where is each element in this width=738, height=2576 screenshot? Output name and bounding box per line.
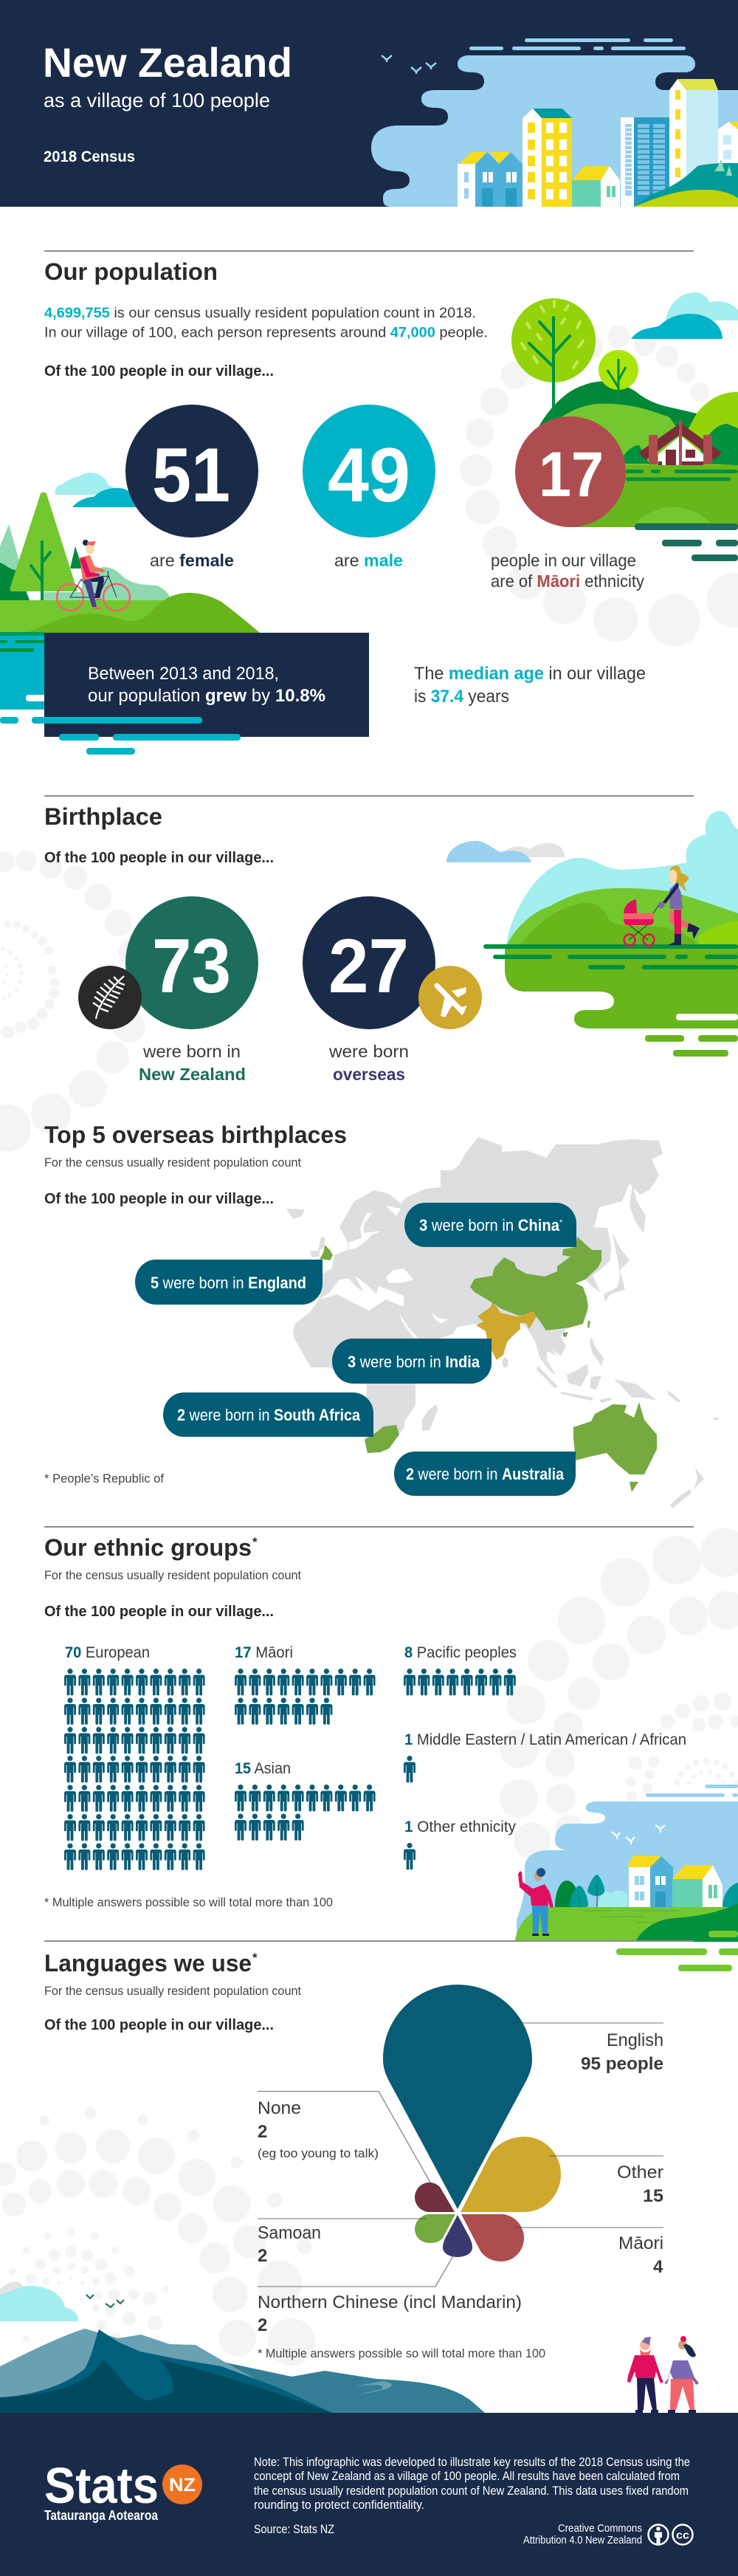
heading: Our population: Our population <box>44 258 218 285</box>
callout: India: 3 were born in India <box>348 1353 480 1371</box>
note text: Source: Stats NZ <box>254 2523 334 2536</box>
label: female: are female <box>150 551 234 570</box>
decorative dots: birthplace <box>0 851 145 1152</box>
pictogram: Other 1 <box>404 1818 516 1869</box>
section rule: population <box>44 250 694 252</box>
petal chart: languages <box>383 1985 561 2261</box>
label: Samoan: 2 <box>258 2246 267 2266</box>
label: None: (eg too young to talk) <box>258 2146 379 2160</box>
label: Northern Chinese <box>258 2292 522 2335</box>
stat: female: 51 <box>152 433 230 518</box>
header banner <box>0 0 738 207</box>
logo: Stats NZ <box>44 2457 202 2523</box>
heading: Birthplace: Birthplace <box>44 803 162 830</box>
note text <box>254 2456 690 2536</box>
map: Australia <box>573 1402 657 1492</box>
footnote: multiple answers: * Multiple answers possible so will total more than 100 <box>44 1896 333 1909</box>
world map <box>286 1137 719 1508</box>
label: Other <box>617 2163 663 2206</box>
label: overseas: were born <box>328 1042 409 1061</box>
stat: born in New Zealand: 73 <box>152 924 231 1009</box>
pictogram: Māori 17: 17 Māori <box>235 1644 293 1661</box>
footnote: multiple answers: * Multiple answers possible so will total more than 100 <box>258 2347 545 2360</box>
icon: attribution <box>648 2525 669 2544</box>
subheading: For the census usually resident population count <box>44 1569 301 1582</box>
icon: silver fern <box>78 966 142 1029</box>
stat: male <box>303 405 435 570</box>
lead-in: Of the 100 people in our village... <box>44 850 274 866</box>
licence text: Attribution 4.0 New Zealand <box>523 2534 642 2546</box>
callout: China <box>404 1203 576 1247</box>
subtitle: as a village of 100 people <box>44 89 270 111</box>
decorative dots: ethnic groups <box>500 1528 738 1859</box>
pictogram: European 70: 70 European <box>65 1644 150 1661</box>
label: Māori <box>618 2233 663 2277</box>
label: overseas <box>328 1042 409 1084</box>
label: Samoan: Samoan <box>258 2223 321 2243</box>
woman figure <box>658 866 700 945</box>
stat: born overseas <box>303 896 482 1084</box>
pictogram: European 70 <box>64 1644 205 1870</box>
callout: China: * <box>559 1218 563 1227</box>
logo: Stats NZ: Tatauranga Aotearoa <box>44 2508 159 2523</box>
illustration: city skyline <box>371 38 738 207</box>
label: English: English <box>607 2030 663 2050</box>
lead-in: Of the 100 people in our village... <box>44 2017 274 2033</box>
pictogram: Asian 15: 15 Asian <box>235 1760 291 1777</box>
label: Māori: are of Māori ethnicity <box>491 571 644 591</box>
subheading: For the census usually resident population count <box>44 1156 301 1169</box>
logo: Stats NZ: NZ <box>169 2475 196 2496</box>
label: Māori <box>491 551 644 591</box>
lead-in: Of the 100 people in our village... <box>44 1191 274 1207</box>
note text: rounding to protect confidentiality. <box>254 2498 424 2512</box>
label: Māori: people in our village <box>491 551 636 570</box>
label: None <box>258 2098 379 2160</box>
inland seas <box>320 1206 448 1339</box>
petal: None <box>415 2182 455 2212</box>
illustration: cyclist landscape <box>0 473 260 710</box>
callout: growth: our population grew by 10.8% <box>88 686 325 706</box>
label: New Zealand <box>139 1042 246 1084</box>
pictogram: Pacific peoples 8: 8 Pacific peoples <box>404 1644 517 1661</box>
lead-in: Of the 100 people in our village... <box>44 1604 274 1620</box>
petal: Māori <box>461 2214 524 2261</box>
illustration: woman with pram <box>446 811 738 1057</box>
callout: growth <box>44 633 369 737</box>
tree: small <box>599 350 638 402</box>
map: China <box>470 1237 601 1330</box>
label: None: 2 <box>258 2122 267 2142</box>
label: Other: 15 <box>643 2186 663 2206</box>
pictogram: Māori 17 <box>235 1644 376 1725</box>
section rule: languages <box>44 1940 694 1942</box>
illustration: mountain <box>0 2281 485 2413</box>
label: Northern Chinese: Northern Chinese (incl Mandarin) <box>258 2292 522 2312</box>
text: median age <box>414 664 646 707</box>
footnote: China: * People’s Republic of <box>44 1472 164 1486</box>
callout: India <box>332 1339 492 1384</box>
census year: 2018 Census <box>44 148 135 165</box>
callout: growth: Between 2013 and 2018, <box>88 664 279 684</box>
population count text: 4,699,755 is our census usually resident population count in 2018. <box>44 305 476 321</box>
pictogram: Asian 15 <box>235 1760 376 1841</box>
illustration: couple <box>627 2336 699 2413</box>
stat: female <box>125 405 258 570</box>
decorative dots: population <box>460 326 738 646</box>
label: overseas: overseas <box>333 1065 405 1084</box>
label: New Zealand: New Zealand <box>139 1065 246 1084</box>
section rule: birthplace <box>44 795 694 797</box>
footer <box>0 2413 738 2576</box>
callout: South Africa: 2 were born in South Africa <box>177 1406 361 1424</box>
icon: creative commons: cc <box>676 2529 689 2541</box>
callout: England: 5 were born in England <box>151 1274 306 1292</box>
petal: Samoan <box>415 2214 455 2243</box>
map: India <box>476 1302 537 1360</box>
lead-in: Of the 100 people in our village... <box>44 363 274 379</box>
stat: Māori <box>491 416 644 591</box>
decorative dots: languages <box>0 2107 315 2366</box>
label: Māori: Māori <box>618 2233 663 2253</box>
petal: Other <box>461 2137 561 2212</box>
label: Other: Other <box>617 2163 663 2182</box>
heading: Top 5 overseas birthplaces: Top 5 overseas birthplaces <box>44 1122 347 1148</box>
map: South Africa <box>365 1425 399 1453</box>
cyclist figure <box>57 540 130 611</box>
licence text <box>523 2522 642 2546</box>
note text: the census usually resident population count of New Zealand. This data uses fixed random <box>254 2484 689 2498</box>
tree: teal <box>570 1875 604 1932</box>
label: None: None <box>258 2098 301 2118</box>
label: English: 95 people <box>581 2054 663 2074</box>
title: New Zealand <box>43 39 292 86</box>
callout: England <box>135 1260 323 1305</box>
label: Māori: 4 <box>653 2257 663 2277</box>
stat: male: 49 <box>328 433 410 518</box>
map: Taiwan and Hainan <box>563 1320 590 1337</box>
tree: large <box>511 298 596 413</box>
pram <box>624 899 658 945</box>
map: England <box>320 1245 333 1260</box>
label: Northern Chinese: 2 <box>258 2315 267 2335</box>
population count text: In our village of 100, each person represents around 47,000 people. <box>44 325 488 341</box>
heading: Languages we use: * <box>252 1951 258 1965</box>
icon: creative commons <box>673 2525 692 2544</box>
petal: English <box>383 1985 532 2209</box>
stat: born in New Zealand <box>78 896 258 1084</box>
label: New Zealand: were born in <box>142 1042 241 1061</box>
pictogram: Pacific peoples 8 <box>404 1644 517 1695</box>
icon: plane <box>418 966 482 1029</box>
pictogram: MELAA 1: 1 Middle Eastern / Latin American / African <box>404 1731 686 1748</box>
stat: Māori: 17 <box>539 439 604 510</box>
figure: pointing person <box>518 1868 554 1936</box>
callout: Australia: 2 were born in Australia <box>406 1465 565 1483</box>
callout: Australia <box>394 1452 576 1496</box>
text: median age: is 37.4 years <box>414 687 509 707</box>
callout: South Africa <box>163 1392 373 1437</box>
heading: Languages we use: Languages we use <box>44 1950 252 1976</box>
label: Samoan <box>258 2223 321 2266</box>
petal: Northern Chinese <box>443 2215 472 2257</box>
label: male: are male <box>334 551 403 570</box>
stat: born overseas: 27 <box>328 924 409 1009</box>
heading: Our ethnic groups: Our ethnic groups <box>44 1534 252 1561</box>
subheading: For the census usually resident population count <box>44 1985 301 1998</box>
logo: Stats NZ: Stats <box>44 2457 159 2514</box>
illustration: person pointing at houses <box>0 0 738 1971</box>
note text: Note: This infographic was developed to illustrate key results of the 2018 Census using the <box>254 2456 690 2469</box>
label: English <box>581 2030 663 2074</box>
population count text <box>44 305 488 341</box>
note text: concept of New Zealand as a village of 100 people. All results have been calculated from <box>254 2470 680 2483</box>
text: median age: The median age in our village <box>414 664 646 684</box>
pictogram: MELAA 1 <box>404 1731 686 1782</box>
leader lines <box>258 2023 663 2287</box>
heading: Our ethnic groups: * <box>252 1535 258 1549</box>
pictogram: Other 1: 1 Other ethnicity <box>404 1818 516 1835</box>
icon: meeting house <box>638 420 722 465</box>
illustration: Māori village hills <box>511 292 738 561</box>
section rule: ethnic groups <box>44 1526 694 1528</box>
licence text: Creative Commons <box>558 2522 642 2535</box>
callout: China: 3 were born in China <box>419 1216 560 1234</box>
